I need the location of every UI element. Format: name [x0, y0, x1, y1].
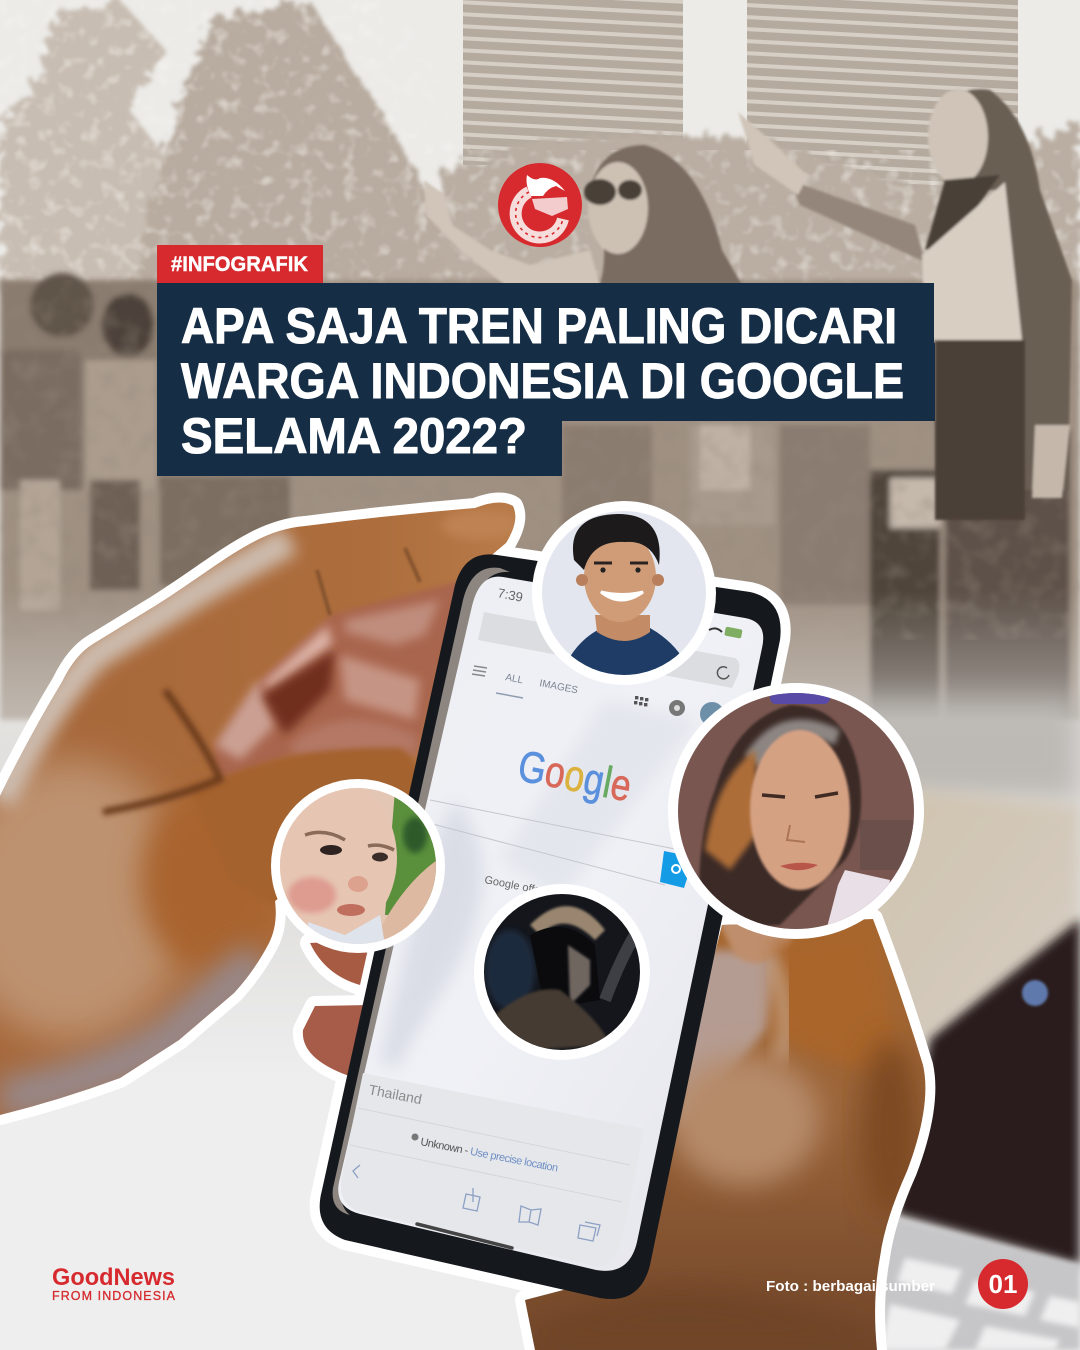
phone: Unknown - Use precise location [419, 1136, 559, 1175]
bell and avatar [669, 700, 724, 726]
laptop blurred [760, 700, 1080, 1350]
reload icon [717, 667, 729, 679]
lower grey edge [0, 960, 260, 1100]
status icons [709, 627, 743, 639]
title [157, 283, 935, 476]
woman centre [424, 145, 742, 285]
trees [0, 0, 1080, 300]
phone: Thailand [367, 1081, 423, 1107]
keyboard keys [880, 1258, 1080, 1350]
home indicator [417, 1224, 512, 1248]
grid icon [634, 696, 648, 706]
tag: #INFOGRAFIK: #INFOGRAFIK [171, 253, 308, 276]
toolbar icons [353, 1165, 600, 1241]
tabs [504, 672, 579, 696]
title: WARGA INDONESIA DI GOOGLE [181, 353, 904, 409]
brand: GoodNews: FROM INDONESIA [52, 1289, 176, 1303]
brand: GoodNews [52, 1264, 176, 1303]
title: APA SAJA TREN PALING DICARI [181, 298, 897, 354]
tag: #INFOGRAFIK [157, 245, 323, 283]
fingers behind phone [303, 940, 370, 1078]
google logo: Google [514, 741, 635, 811]
tabs: ALL [504, 672, 524, 686]
laptop LED [1022, 980, 1048, 1006]
right hand [520, 900, 940, 1350]
crowd speckle [0, 280, 1080, 640]
white fade [0, 590, 1080, 1080]
buildings [463, 0, 1018, 195]
status time: 7:39 [496, 585, 524, 605]
foliage speckle [0, 0, 1080, 300]
index finger [216, 745, 416, 905]
portrait: dark poster [474, 884, 650, 1060]
crowd [0, 273, 1080, 720]
woman right [738, 89, 1072, 520]
inner fingers [213, 581, 461, 779]
offered text: Google offered [483, 874, 557, 900]
logo badge [498, 163, 582, 247]
white cut-out outlines [0, 502, 925, 1350]
thumb tip glow [442, 511, 518, 539]
title: SELAMA 2022? [181, 408, 527, 464]
search bar [425, 800, 690, 885]
brand: GoodNews: GoodNews [52, 1264, 175, 1291]
page number: 01 [989, 1269, 1017, 1299]
tabs: IMAGES [538, 678, 579, 696]
illustration: hands holding phone [0, 490, 940, 1350]
screen reflections [500, 700, 700, 900]
location panel [341, 1073, 644, 1266]
hand back tan [0, 760, 190, 1040]
portrait: smiling man [530, 500, 720, 690]
pale knuckle edge [0, 540, 290, 800]
phone [320, 554, 781, 1299]
portrait: woman with long hair [668, 683, 924, 939]
portrait: baby [271, 779, 445, 953]
creases [103, 690, 220, 812]
menu icon [472, 666, 487, 676]
page number [978, 1259, 1028, 1309]
left hand [0, 490, 530, 1130]
address bar [478, 612, 739, 688]
photo credit: Foto : berbagai sumber [766, 1278, 935, 1295]
